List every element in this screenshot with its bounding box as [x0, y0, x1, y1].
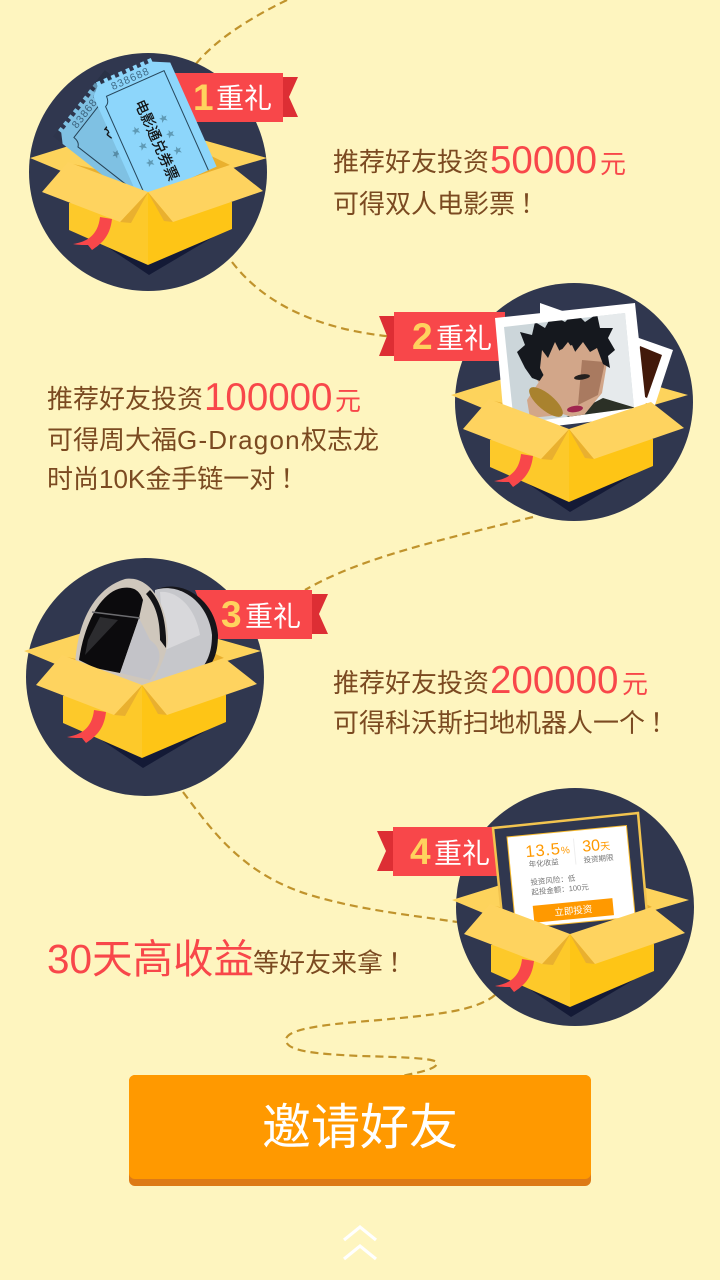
text: prize 1: 元 [600, 149, 626, 179]
text: prize 1 [333, 139, 626, 219]
ribbon 4 [377, 827, 505, 876]
circle 4 [456, 788, 694, 1026]
button: invite friends [129, 1075, 591, 1186]
text: prize 1: 推荐好友投资 [333, 147, 489, 177]
front photo [495, 303, 646, 426]
robot vacuum [75, 579, 218, 690]
ribbon 3: 3 [221, 594, 242, 635]
text: prize 3: 200000 [490, 659, 618, 702]
ticket back [53, 70, 204, 214]
text: prize 2: 权志龙 [301, 425, 379, 455]
ribbon 2: 2 [412, 316, 433, 357]
open box 1 [42, 162, 263, 275]
ticket front [89, 51, 217, 201]
button: invite friends: 邀请好友 [262, 1101, 458, 1155]
investment card: 投资风险：低 [530, 873, 576, 887]
text: prize 2: 可得周大福G-Dragon [47, 425, 301, 455]
open box 3 [36, 655, 257, 768]
circle 3 [26, 558, 264, 796]
investment card: 13.5% [525, 839, 571, 861]
text: prize 2: 元 [335, 386, 361, 416]
text: prize 4: 等好友来拿！ [253, 948, 414, 978]
ribbon 1 [170, 73, 298, 122]
panel: prize 3 robot [24, 558, 328, 796]
back photo [540, 303, 673, 405]
panel: prize 1 movie tickets [29, 51, 298, 291]
investment card [493, 813, 648, 945]
text: prize 4: 30天高收益 [47, 936, 254, 982]
text: prize 3 [333, 659, 676, 738]
text: prize 1: 50000 [490, 139, 597, 182]
investment card: 立即投资 [554, 903, 593, 919]
ribbon 4: 重礼 [434, 838, 490, 869]
ribbon 3 [195, 590, 328, 639]
open box 4 [464, 904, 685, 1017]
ribbon 1: 1 [193, 77, 214, 118]
circle 2 [455, 283, 693, 521]
ribbon 1: 重礼 [216, 83, 272, 114]
panel: prize 4 high yield [377, 788, 694, 1026]
ribbon 2 [379, 312, 505, 361]
text: prize 4 [47, 936, 414, 982]
text: prize 3: 可得科沃斯扫地机器人一个！ [333, 708, 676, 738]
ribbon 4: 4 [410, 831, 431, 872]
icon: double chevron up [344, 1227, 376, 1259]
panel: prize 2 photo [379, 283, 693, 521]
investment card: 30天 [582, 836, 611, 856]
dashed connector path [183, 0, 533, 1076]
text: prize 2: 推荐好友投资 [47, 384, 203, 414]
open box 2 [463, 399, 684, 512]
text: prize 2: 时尚10K金手链一对！ [47, 464, 306, 494]
text: prize 1: 可得双人电影票！ [333, 189, 546, 219]
text: prize 3: 元 [622, 669, 648, 699]
text: prize 2: 100000 [204, 376, 332, 419]
ribbon 2: 重礼 [436, 323, 492, 354]
investment card: 投资期限 [583, 852, 614, 865]
text: prize 2 [47, 376, 379, 494]
ribbon 3: 重礼 [245, 601, 301, 632]
investment card: 起投金额：100元 [531, 881, 590, 897]
investment card: 年化收益 [528, 856, 560, 869]
text: prize 3: 推荐好友投资 [333, 668, 489, 698]
circle 1 [29, 53, 267, 291]
